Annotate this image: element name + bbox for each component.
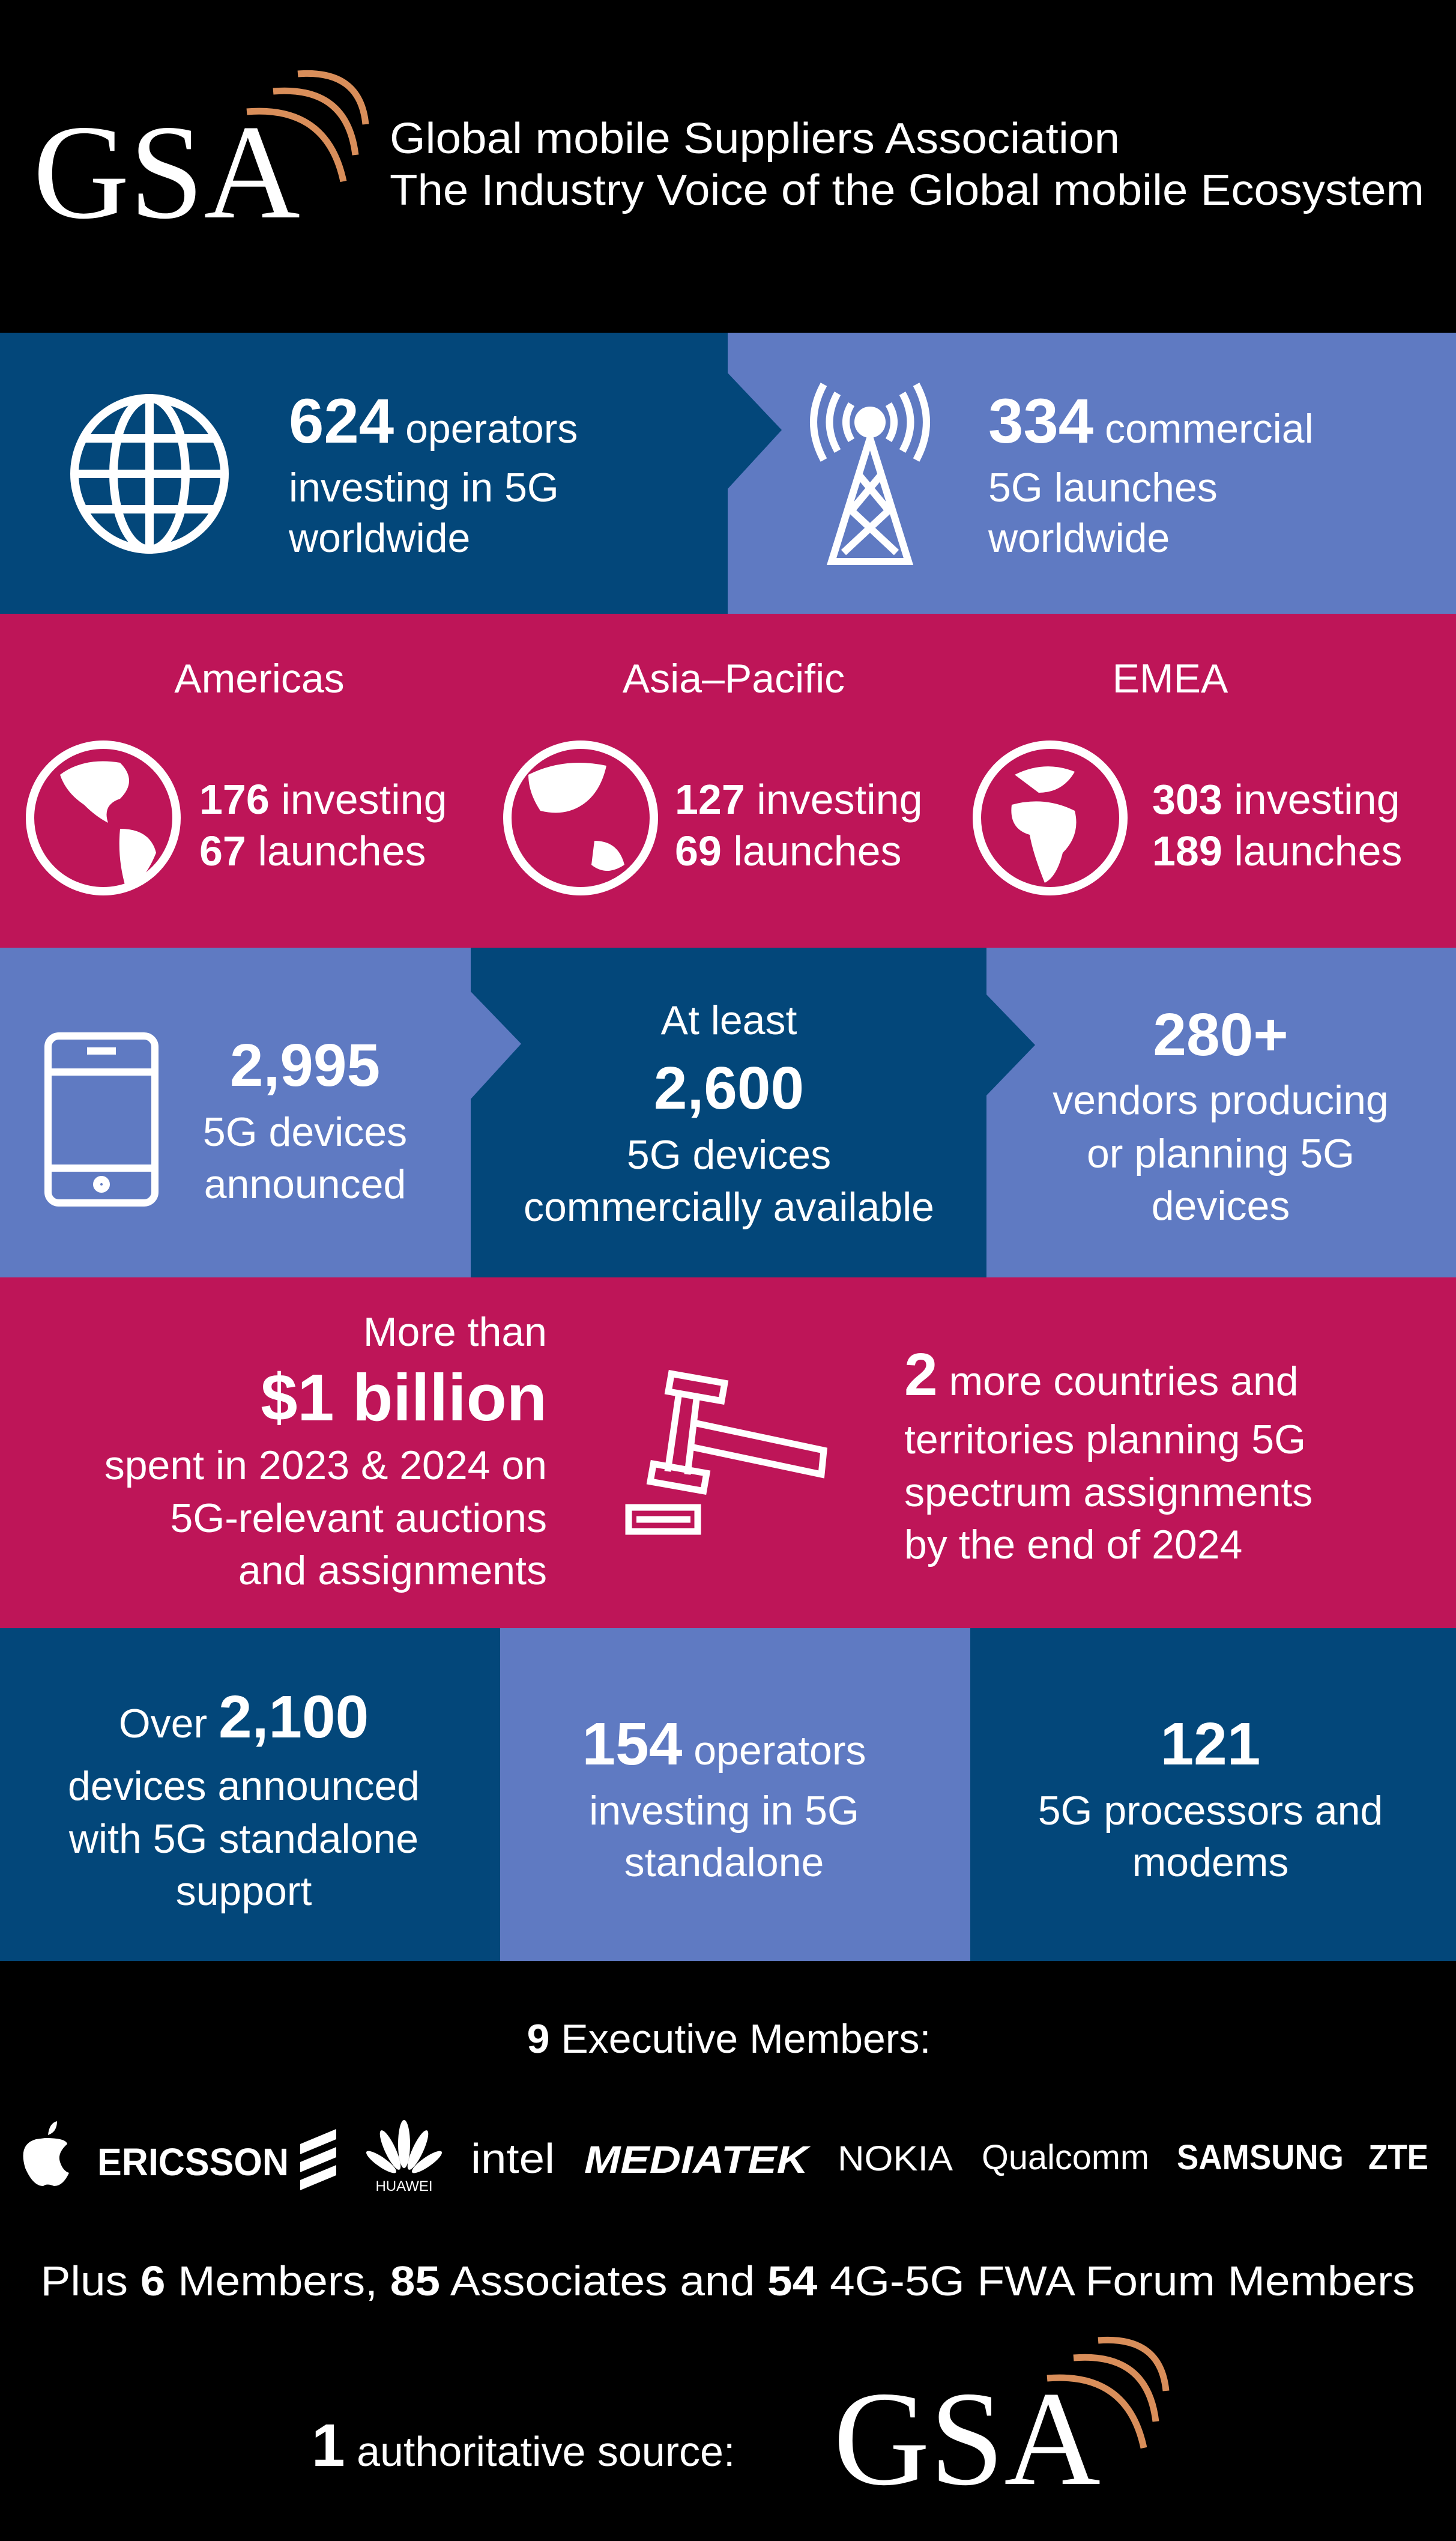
text: devices announced: 2,995 <box>230 1032 380 1099</box>
text: billion spent: $1 billion <box>261 1361 547 1435</box>
text: SA operators: investing in 5G <box>589 1788 859 1834</box>
icon: gavel <box>629 1373 824 1531</box>
text: billion spent: 5G-relevant auctions <box>171 1495 547 1541</box>
text: emea stats <box>1152 776 1402 874</box>
logos row: HUAWEI <box>375 2178 433 2194</box>
text: billion spent: and assignments <box>238 1548 547 1593</box>
logos row: intel <box>471 2135 555 2182</box>
text: commercially available: At least <box>661 998 797 1043</box>
text: billion spent: More than <box>363 1309 547 1355</box>
text: vendors: devices <box>1152 1183 1290 1229</box>
text: SA devices: Over 2,100 <box>119 1683 369 1751</box>
icon: globe emea <box>977 745 1123 891</box>
text: americas stats <box>199 776 447 874</box>
text: emea stats: 303 investing <box>1152 776 1400 823</box>
icon: tower <box>814 384 926 562</box>
heading: executive members: 9 Executive Members: <box>527 2016 931 2062</box>
text: devices announced: 5G devices <box>203 1109 407 1155</box>
logos row: SAMSUNG <box>1177 2138 1344 2177</box>
text: SA devices <box>68 1683 420 1914</box>
panel: devices <box>0 948 1456 1277</box>
header: tagline <box>390 115 1424 214</box>
logos row: ERICSSON <box>97 2140 289 2184</box>
text: operators investing: 624 operators <box>289 386 578 456</box>
panel: standalone <box>0 1628 1456 1961</box>
text: asia stats: 127 investing <box>675 776 923 823</box>
icon: globe <box>74 398 225 550</box>
text: countries planning: 2 more countries and <box>904 1341 1299 1408</box>
text: americas stats: 176 investing <box>199 776 447 823</box>
text: SA devices: support <box>176 1868 312 1914</box>
text: countries planning: by the end of 2024 <box>904 1522 1242 1567</box>
text: SA operators: standalone <box>624 1840 824 1885</box>
text: processors: modems <box>1132 1840 1288 1885</box>
icon: globe americas <box>30 745 177 891</box>
text: billion spent: spent in 2023 & 2024 on <box>104 1443 547 1488</box>
text: SA devices: with 5G standalone <box>68 1816 418 1862</box>
logos row <box>23 2120 1428 2194</box>
text: americas stats: 67 launches <box>199 828 426 874</box>
text: operators investing <box>288 386 578 561</box>
text: countries planning: spectrum assignments <box>904 1470 1313 1515</box>
text: commercial launches: 334 commercial <box>988 386 1314 456</box>
text: asia stats <box>675 776 923 874</box>
heading: regions <box>174 656 1228 701</box>
text: authoritative source: 1 authoritative source: <box>312 2412 735 2479</box>
text: commercial launches: worldwide <box>988 515 1170 561</box>
text: emea stats: 189 launches <box>1152 828 1402 874</box>
header: tagline: The Industry Voice of the Global mobile Ecosystem <box>390 166 1424 214</box>
heading: regions: EMEA <box>1113 656 1228 701</box>
panel: row 1 <box>0 333 1456 614</box>
text: SA operators: 154 operators <box>582 1710 866 1778</box>
logos row: ZTE <box>1368 2138 1428 2177</box>
text: SA operators <box>582 1710 866 1885</box>
text: vendors: vendors producing <box>1053 1077 1389 1123</box>
text: commercial launches <box>988 386 1314 561</box>
text: billion spent <box>104 1309 547 1593</box>
text: countries planning <box>904 1341 1313 1567</box>
text: processors: 5G processors and <box>1038 1788 1383 1834</box>
header: GSA logo: GSA <box>33 97 300 247</box>
text: devices announced <box>203 1032 407 1207</box>
text: vendors <box>1053 1001 1389 1229</box>
icon: phone <box>48 1036 155 1203</box>
footer GSA logo: GSA <box>833 2363 1101 2513</box>
text: commercially available: 2,600 <box>654 1055 804 1122</box>
text: vendors: 280+ <box>1153 1001 1288 1068</box>
logos row: NOKIA <box>838 2139 953 2178</box>
panel: regions <box>0 614 1456 948</box>
icon: globe asia <box>507 745 654 891</box>
text: commercially available: commercially available <box>524 1184 934 1230</box>
text: operators investing: worldwide <box>288 515 470 561</box>
text: processors: 121 <box>1161 1710 1260 1778</box>
text: devices announced: announced <box>204 1161 406 1207</box>
logos row: Qualcomm <box>982 2138 1149 2177</box>
text: countries planning: territories planning 5G <box>904 1417 1306 1462</box>
text: commercial launches: 5G launches <box>988 465 1218 510</box>
text: asia stats: 69 launches <box>675 828 902 874</box>
header: tagline: Global mobile Suppliers Association <box>390 115 1120 163</box>
heading: regions: Americas <box>174 656 345 701</box>
heading: regions: Asia–Pacific <box>623 656 845 701</box>
text: processors <box>1038 1710 1383 1885</box>
text: commercially available: 5G devices <box>627 1132 831 1178</box>
text: operators investing: investing in 5G <box>289 465 559 510</box>
logos row: MEDIATEK <box>584 2138 811 2181</box>
text: plus members: Plus 6 Members, 85 Associates and 54 4G-5G FWA Forum Members <box>41 2258 1415 2304</box>
text: vendors: or planning 5G <box>1087 1131 1355 1177</box>
panel: spectrum <box>0 1277 1456 1628</box>
text: commercially available <box>524 998 934 1230</box>
text: SA devices: devices announced <box>68 1763 420 1809</box>
